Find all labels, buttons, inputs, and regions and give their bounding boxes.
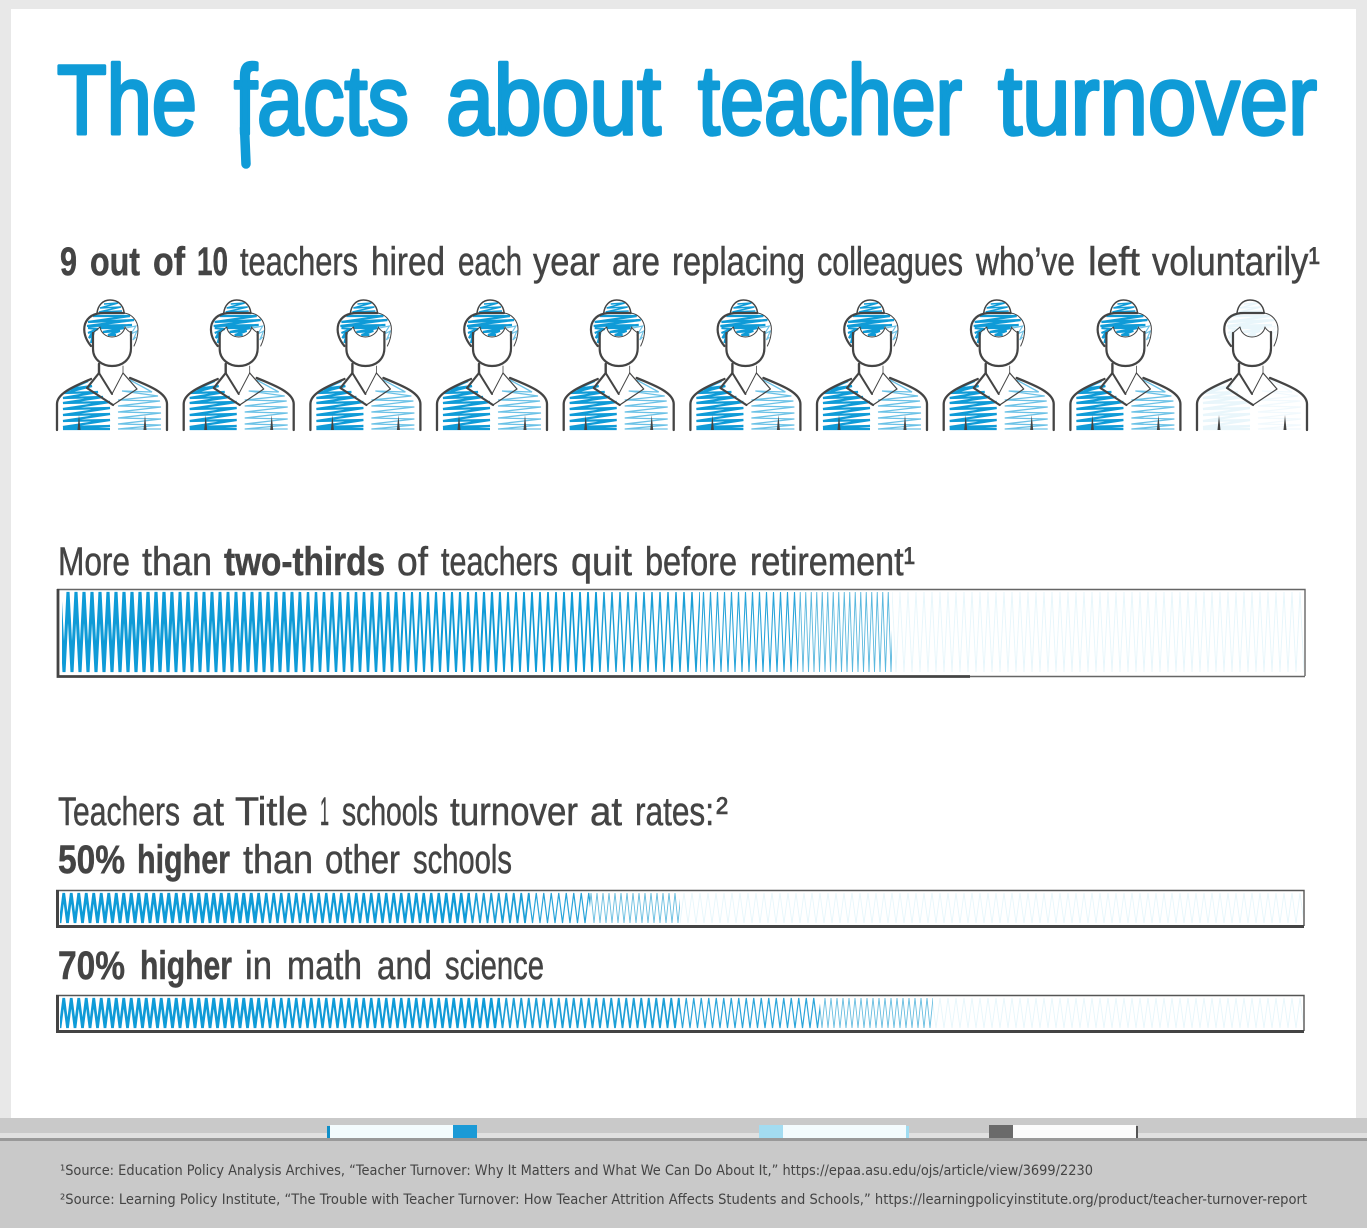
heading: 9 out of 10: colleagues: [817, 240, 963, 284]
heading: 9 out of 10: 9: [60, 240, 77, 284]
heading: Title 1 schools: ²: [716, 790, 728, 834]
title: The: [57, 45, 197, 155]
heading: 9 out of 10: are: [612, 240, 660, 284]
heading: 9 out of 10: each: [458, 240, 522, 284]
title: [57, 45, 1317, 164]
heading: Title 1 schools: 1: [320, 790, 329, 834]
heading: 9 out of 10: 10: [197, 240, 228, 284]
marker: blue: [327, 1125, 477, 1138]
heading: 9 out of 10: who’ve: [975, 240, 1075, 284]
bar chart: two-thirds quit: [57, 589, 1305, 676]
heading: 50% higher: schools: [413, 838, 512, 882]
marker: dark gray: [989, 1125, 1138, 1138]
heading: Title 1 schools: at: [192, 790, 224, 834]
title: teacher: [698, 45, 962, 155]
heading: two-thirds: two-thirds: [224, 540, 385, 584]
heading: 9 out of 10: out: [90, 240, 140, 284]
heading: 70% higher: 70%: [58, 944, 125, 988]
heading: 9 out of 10: hired: [371, 240, 445, 284]
heading: 9 out of 10: voluntarily¹: [1152, 240, 1320, 284]
heading: two-thirds: quit: [571, 540, 632, 584]
bar chart: 50% higher: [56, 890, 1304, 926]
heading: two-thirds: More: [58, 540, 130, 584]
heading: 9 out of 10: [60, 240, 1320, 284]
heading: two-thirds: of: [397, 540, 429, 584]
marker: light blue: [759, 1125, 909, 1138]
heading: 50% higher: than: [243, 838, 313, 882]
heading: 9 out of 10: of: [153, 240, 186, 284]
heading: 70% higher: math: [287, 944, 362, 988]
heading: Title 1 schools: [58, 790, 728, 834]
heading: 70% higher: science: [445, 944, 544, 988]
title: turnover: [998, 45, 1317, 155]
heading: Title 1 schools: rates:: [635, 790, 714, 834]
bar chart: 70% higher: [56, 995, 1304, 1032]
heading: 50% higher: other: [325, 838, 400, 882]
title: about: [446, 45, 661, 155]
heading: 70% higher: and: [377, 944, 432, 988]
marker tray: [0, 1118, 1367, 1228]
heading: 9 out of 10: replacing: [672, 240, 805, 284]
heading: 9 out of 10: teachers: [240, 240, 358, 284]
heading: 9 out of 10: left: [1088, 240, 1140, 284]
heading: two-thirds: than: [142, 540, 212, 584]
heading: 70% higher: [58, 944, 544, 988]
heading: two-thirds: before: [645, 540, 737, 584]
heading: Title 1 schools: Title: [235, 790, 308, 834]
heading: two-thirds: [58, 540, 915, 584]
heading: 50% higher: [58, 838, 512, 882]
heading: two-thirds: retirement¹: [750, 540, 915, 584]
heading: 70% higher: higher: [140, 944, 232, 988]
heading: 70% higher: in: [245, 944, 272, 988]
heading: Title 1 schools: turnover: [450, 790, 578, 834]
heading: two-thirds: teachers: [441, 540, 558, 584]
heading: Title 1 schools: schools: [342, 790, 438, 834]
heading: Title 1 schools: at: [590, 790, 622, 834]
heading: 50% higher: higher: [137, 838, 230, 882]
title: facts: [234, 45, 409, 155]
source footnote 1: ¹Source: Education Policy Analysis Archives, “Teacher Turnover: Why It Matters and What We Can Do About It,” https://epaa.asu.edu/ojs/article/view/3699/2230: [60, 1163, 1093, 1179]
heading: 50% higher: 50%: [58, 838, 125, 882]
pictogram: 9 of 10 teachers: [57, 300, 1307, 430]
heading: 9 out of 10: year: [533, 240, 600, 284]
heading: Title 1 schools: Teachers: [58, 790, 180, 834]
